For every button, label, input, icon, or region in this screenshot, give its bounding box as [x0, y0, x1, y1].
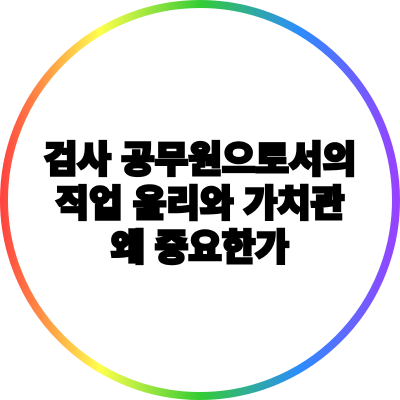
title line 1: 검사 공무원으로서의 — [44, 139, 356, 180]
title line 2: 직업 윤리와 가치관 — [56, 183, 344, 224]
title line 3: 왜 중요한가 — [111, 227, 289, 268]
title — [44, 139, 356, 268]
